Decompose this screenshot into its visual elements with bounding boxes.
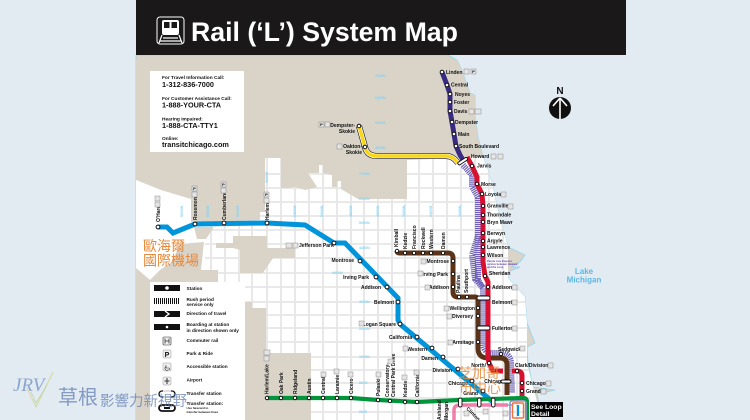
- blue line: P: [222, 182, 225, 187]
- chinese label: Chicago downtown: 市中心: [459, 380, 501, 396]
- blue line: [155, 182, 512, 405]
- yellow line: Skokie: [339, 129, 355, 135]
- red line: Belmont: [492, 300, 512, 306]
- blue line: Division: [433, 368, 452, 374]
- legend: Rush period: [186, 297, 214, 302]
- brown line: Paulina: [456, 275, 462, 293]
- legend: [150, 282, 245, 420]
- street address labels: 4800N: [375, 146, 386, 150]
- blue line: Damen: [421, 356, 438, 362]
- street address labels: 4800W: [349, 205, 353, 217]
- watermark logo: [13, 372, 187, 410]
- legend symbols: P: [165, 352, 170, 359]
- purple line: Main: [458, 132, 469, 138]
- street address labels: 1600W: [458, 205, 462, 217]
- red line: Jarvis: [477, 164, 492, 170]
- pink line: Ashland: [437, 400, 443, 420]
- red line: Sheridan: [489, 271, 510, 277]
- lake label: Lake: [575, 267, 594, 276]
- brown line: Francisco: [412, 225, 418, 249]
- green line: Kedzie: [403, 381, 409, 397]
- blue line: Grand: [463, 391, 478, 397]
- green line: Conservatory-: [385, 363, 391, 397]
- street address labels: 3200N: [359, 300, 370, 304]
- contact information box: Online:: [162, 136, 179, 142]
- legend: Commuter rail: [186, 338, 218, 343]
- see loop detail callout: Detail: [531, 411, 550, 418]
- contact information box: 1-888-CTA-TTY1: [162, 121, 218, 130]
- street address labels: 9600W: [180, 205, 184, 217]
- green line: California: [415, 374, 421, 397]
- blue line: Western: [407, 347, 427, 353]
- contact information box: 1-888-YOUR-CTA: [162, 100, 222, 110]
- brown line: Southport: [464, 269, 470, 293]
- purple express rush-period line: [463, 165, 512, 393]
- red line: Berwyn: [487, 231, 505, 237]
- purple line: P: [472, 69, 475, 74]
- note: purple rush text: service between Howard: [487, 262, 518, 266]
- street address labels: 6000N: [359, 197, 370, 201]
- pink line: [437, 400, 508, 420]
- street address labels: 4000N: [332, 271, 343, 275]
- contact information box: 1-312-836-7000: [162, 80, 214, 89]
- blue line: P: [193, 186, 196, 191]
- street address labels: 2400N: [359, 327, 370, 331]
- yellow line: Dempster-: [330, 123, 355, 129]
- street address labels: 5600N: [375, 121, 386, 125]
- brown line: Chicago: [484, 379, 504, 385]
- brown line: Armitage: [452, 340, 474, 346]
- brown line: Kedzie: [403, 233, 409, 249]
- icon: north arrow: N: [556, 86, 564, 97]
- street address labels: 6400W: [293, 205, 297, 217]
- green line: Ridgeland: [293, 370, 299, 394]
- contact information box: transitchicago.com: [162, 140, 229, 149]
- legend: Transfer station: [186, 391, 222, 396]
- blue line: Chicago: [448, 381, 468, 387]
- loop box: [510, 401, 526, 420]
- brown line: Wellington: [450, 306, 475, 312]
- purple line: [440, 69, 499, 160]
- icon: train: [157, 17, 184, 44]
- beige non-city patches: [136, 60, 483, 420]
- street address labels: 0N/S: [359, 410, 368, 414]
- contact information box: [150, 71, 244, 152]
- street address labels: 4400N: [359, 246, 370, 250]
- blue line: Cumberland: [222, 191, 228, 220]
- green line: Pulaski: [376, 378, 382, 396]
- chinese label: Chicago downtown: 芝加哥: [458, 365, 500, 381]
- note: purple rush text: [487, 259, 518, 269]
- blue line: California: [389, 335, 412, 341]
- brown line: Western: [429, 229, 435, 249]
- blue line: Belmont: [374, 300, 394, 306]
- contact information box: Hearing Impaired:: [162, 116, 203, 122]
- green line: Laramie: [335, 375, 341, 394]
- red line: Argyle: [487, 238, 503, 244]
- legend: Accessible station: [186, 364, 228, 369]
- red line: Wilson: [487, 253, 503, 259]
- yellow line: Oakton-: [343, 144, 362, 150]
- contact information box: For Customer Assistance Call:: [162, 96, 232, 102]
- street address labels: 1600N: [359, 355, 370, 359]
- icon: north arrow: [549, 86, 571, 119]
- brown line: Sedgwick: [498, 347, 521, 353]
- blue line: P: [265, 192, 268, 197]
- blue line: Irving Park: [343, 275, 369, 281]
- purple line: Dempster: [455, 120, 478, 126]
- brown line: Damen: [441, 232, 447, 249]
- brown line: Addison: [429, 285, 449, 291]
- red line: Grand: [526, 389, 541, 395]
- yellow line: [319, 122, 458, 163]
- red line: Bryn Mawr: [487, 220, 513, 226]
- blue line: Harlem: [265, 202, 271, 220]
- note: purple rush text: Purple Line Express: [487, 259, 512, 263]
- street address labels: [180, 74, 462, 414]
- legend: Direction of travel: [186, 311, 226, 316]
- red line: North/: [471, 363, 487, 369]
- title: Rail (‘L’) System Map: [191, 17, 458, 47]
- chinese label: O'Hare airport: [143, 238, 199, 268]
- watermark logo: 影響力新視野: [100, 392, 187, 410]
- red line: Lawrence: [487, 245, 510, 251]
- brown line: Irving Park: [422, 272, 448, 278]
- red line: Addison: [492, 285, 512, 291]
- red line: Morse: [481, 182, 496, 188]
- green line: Austin: [307, 378, 313, 394]
- green line: Oak Park: [279, 372, 285, 394]
- red line: Loyola: [485, 192, 501, 198]
- red line: Clark/Division: [515, 363, 548, 369]
- green line: Central: [321, 376, 327, 394]
- blue line: Jefferson Park: [299, 243, 334, 249]
- red line: Thorndale: [487, 212, 511, 218]
- purple line: Davis: [454, 109, 468, 115]
- legend: Station: [186, 286, 203, 291]
- legend: Use farecard to: [186, 406, 209, 410]
- brown line: Kimball: [394, 228, 400, 247]
- blue line: Rosemont: [193, 195, 199, 220]
- street address labels: 5600W: [320, 205, 324, 217]
- brown line: Rockwell: [421, 227, 427, 249]
- purple line: Noyes: [455, 92, 470, 98]
- purple line: Central: [451, 82, 469, 88]
- street address labels: 8000W: [236, 205, 240, 217]
- purple line: Linden: [446, 70, 462, 76]
- chinese label: Chicago downtown: [458, 365, 501, 396]
- blue line: Montrose: [332, 258, 354, 264]
- purple line: South Boulevard: [459, 144, 499, 150]
- yellow line: P: [320, 122, 323, 127]
- legend: transfer between lines: [186, 410, 219, 414]
- legend: Airport: [186, 378, 203, 382]
- contact information box: For Travel Information Call:: [162, 75, 225, 81]
- header bar: [136, 0, 626, 55]
- green line: Central Park Drive: [391, 353, 397, 397]
- red line: Granville: [487, 204, 509, 210]
- land area with shoreline: [136, 55, 555, 420]
- see loop detail callout: See Loop: [531, 404, 562, 411]
- green line: [264, 350, 527, 420]
- street address labels: 4000W: [376, 205, 380, 217]
- pink line: Morgan: [444, 402, 450, 420]
- street address labels: 8800W: [206, 205, 210, 217]
- legend: Park & Ride: [186, 351, 213, 356]
- green line: Cicero: [349, 378, 355, 394]
- red line: Fullerton: [492, 326, 513, 332]
- brown line: [394, 225, 525, 395]
- legend: Boarding at station: [186, 322, 229, 327]
- legend: in direction shown only: [186, 328, 239, 333]
- watermark logo: 草根: [58, 386, 98, 409]
- lake label: Michigan: [567, 276, 601, 284]
- blue line: Logan Square: [363, 322, 396, 328]
- blue line: Addison: [361, 285, 381, 291]
- brown line: Diversey: [452, 314, 473, 320]
- green line: Harlem/Lake: [264, 364, 270, 394]
- white city area: [136, 157, 542, 420]
- street address labels: 5200N: [359, 221, 370, 225]
- blue line: O'Hare: [156, 206, 162, 222]
- chinese label: O'Hare airport: 國際機場: [143, 252, 199, 268]
- brown line: Montrose: [426, 259, 449, 265]
- red line: [467, 154, 553, 397]
- chinese label: O'Hare airport: 歐海爾: [143, 238, 185, 254]
- see loop detail callout: [530, 402, 563, 418]
- yellow line: Skokie: [346, 150, 362, 156]
- legend: service only: [186, 302, 214, 307]
- street address labels: 800N: [359, 381, 368, 385]
- street address labels: 3200W: [402, 205, 406, 217]
- red line: Howard: [471, 154, 489, 160]
- lake label: [567, 267, 601, 284]
- note: purple rush text: and the Loop: [487, 265, 504, 269]
- legend: Transfer station:: [186, 401, 224, 406]
- street address labels: 9600W: [265, 171, 269, 183]
- street address labels: 7600N: [375, 74, 386, 78]
- transfer stations: [457, 157, 511, 407]
- watermark logo: JRV: [13, 375, 47, 396]
- street address labels: 6400N: [375, 96, 386, 100]
- red line: Chicago: [526, 381, 546, 387]
- purple line: Foster: [454, 100, 469, 106]
- street address labels: 7200N: [359, 172, 370, 176]
- street address labels: 2400W: [429, 205, 433, 217]
